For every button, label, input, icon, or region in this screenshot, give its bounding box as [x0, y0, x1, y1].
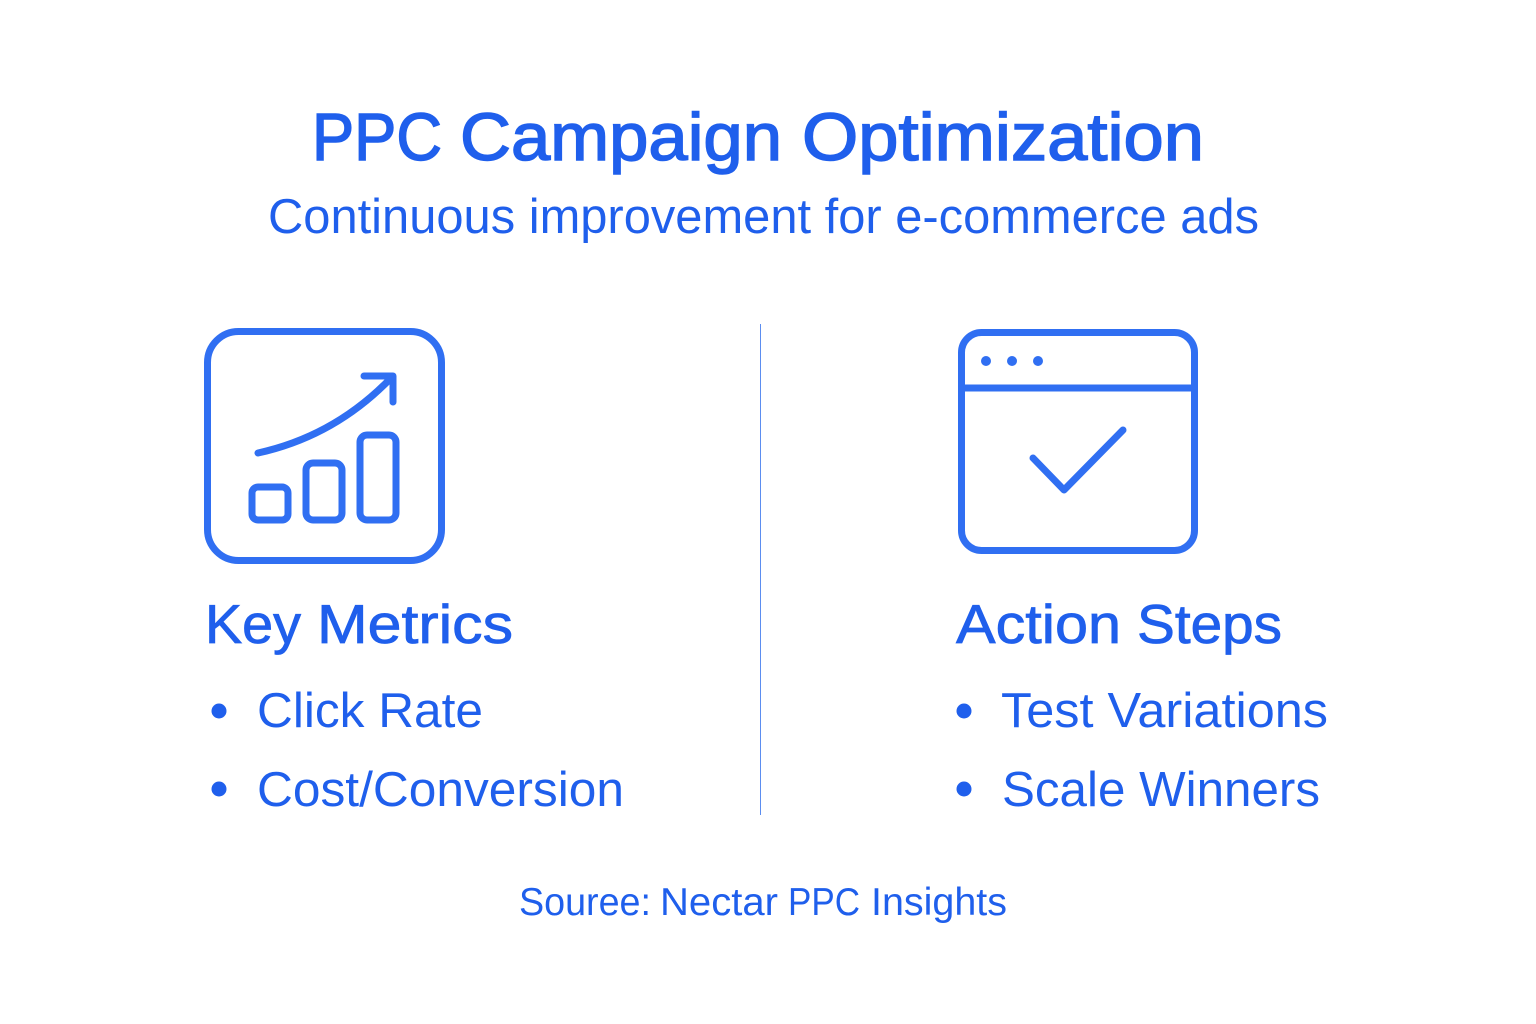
- list item: scale winners: Scale Winners: [1002, 763, 1320, 817]
- heading: action steps: [956, 593, 1282, 655]
- list item: cost per conversion: Cost/Conversion: [257, 763, 624, 817]
- title: PPC: [312, 100, 442, 175]
- panel: action steps: [956, 332, 1328, 817]
- vertical divider: [760, 324, 761, 815]
- source note: Nectar: [660, 881, 778, 924]
- heading: key metrics: [205, 593, 513, 655]
- list item: click rate: Click Rate: [257, 684, 483, 738]
- title: Optimization: [802, 100, 1204, 175]
- icon: growth chart: [208, 332, 442, 560]
- source note: PPC: [788, 881, 860, 924]
- list item: test variations: Test Variations: [1001, 684, 1328, 738]
- source note: Insights: [871, 881, 1007, 924]
- source note: [519, 881, 1007, 924]
- heading: key metrics: Key: [205, 593, 301, 655]
- heading: key metrics: Metrics: [317, 593, 513, 655]
- source note: Souree:: [519, 881, 651, 924]
- title: [312, 100, 1204, 175]
- heading: action steps: Action: [956, 593, 1121, 655]
- subtitle: Continuous improvement for e-commerce ads: [268, 190, 1259, 244]
- icon: browser window with check: [962, 332, 1194, 550]
- title: Campaign: [460, 100, 782, 175]
- heading: action steps: Steps: [1137, 593, 1282, 655]
- panel: key metrics: [205, 332, 624, 817]
